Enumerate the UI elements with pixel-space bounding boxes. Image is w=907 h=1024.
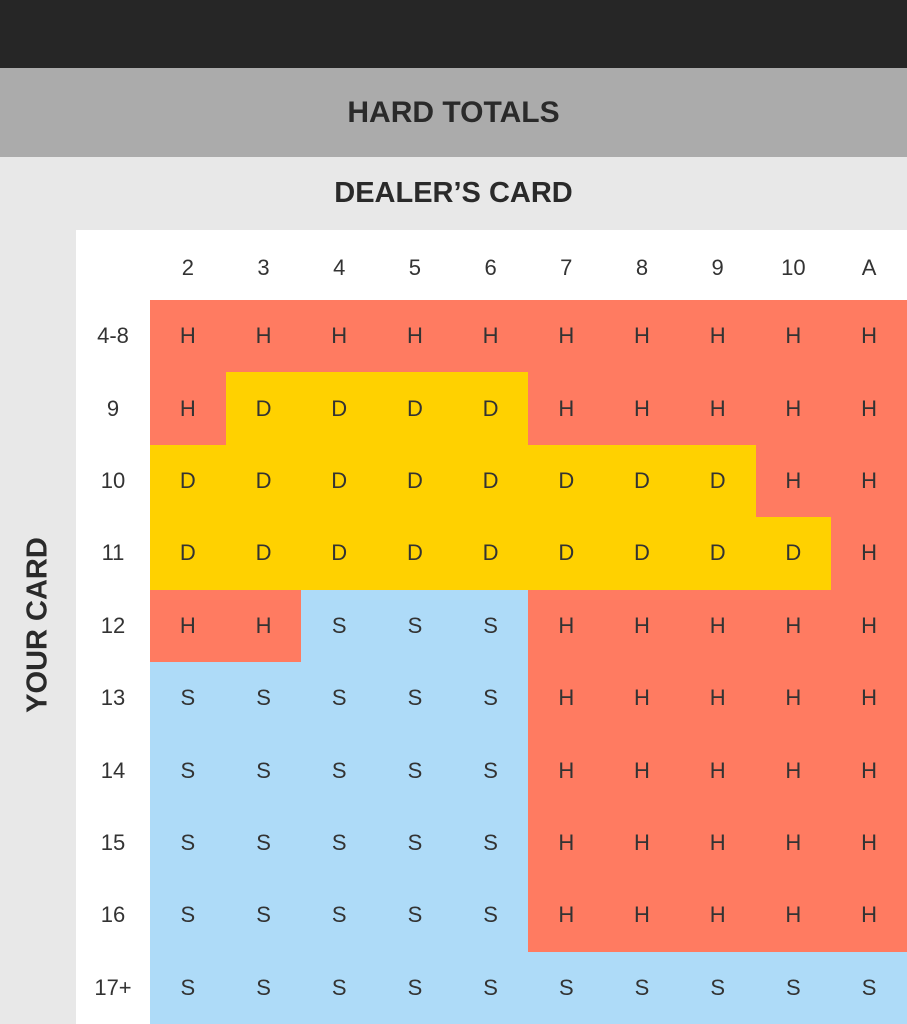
strategy grid: H [558, 323, 574, 348]
strategy grid: S [256, 758, 271, 783]
strategy grid: H [634, 323, 650, 348]
strategy grid: H [331, 323, 347, 348]
player row labels: 15 [101, 830, 125, 855]
strategy grid: D [180, 468, 196, 493]
strategy grid: H [634, 902, 650, 927]
title band [0, 68, 907, 157]
strategy grid: S [559, 975, 574, 1000]
strategy grid: H [785, 685, 801, 710]
strategy grid: S [862, 975, 876, 1000]
strategy grid: H [861, 758, 877, 783]
dealer column headers: 5 [409, 255, 421, 280]
strategy grid: D [634, 540, 650, 565]
player row labels: 10 [101, 468, 125, 493]
strategy grid: S [408, 685, 422, 710]
strategy grid: S [332, 613, 347, 638]
strategy grid: D [407, 468, 423, 493]
dealer's card header: DEALER’S CARD [334, 177, 573, 209]
strategy grid: D [483, 468, 499, 493]
strategy grid: H [634, 830, 650, 855]
strategy grid: S [408, 975, 422, 1000]
strategy grid: D [483, 396, 499, 421]
strategy grid: D [558, 468, 574, 493]
strategy grid: H [785, 396, 801, 421]
strategy grid: S [483, 685, 498, 710]
strategy grid: S [786, 975, 801, 1000]
strategy grid: H [483, 323, 499, 348]
strategy grid: D [331, 396, 347, 421]
player row labels: 12 [101, 613, 125, 638]
left side column: your card [0, 230, 76, 1024]
strategy grid: H [861, 323, 877, 348]
strategy grid: D [483, 540, 499, 565]
strategy grid: D [710, 540, 726, 565]
strategy grid: H [861, 685, 877, 710]
dealer column headers: 7 [560, 255, 572, 280]
strategy grid: H [634, 613, 650, 638]
strategy grid: H [710, 396, 726, 421]
strategy grid: D [634, 468, 650, 493]
strategy grid: S [408, 613, 422, 638]
player row labels: 11 [102, 540, 124, 565]
strategy grid: D [407, 396, 423, 421]
strategy grid: H [558, 685, 574, 710]
strategy grid: H [785, 613, 801, 638]
strategy grid: H [785, 758, 801, 783]
strategy grid: H [558, 902, 574, 927]
player row labels [94, 323, 132, 1000]
strategy grid: S [408, 830, 422, 855]
strategy grid: S [180, 830, 195, 855]
strategy grid: H [861, 468, 877, 493]
player row labels: 13 [101, 685, 125, 710]
strategy grid: D [331, 540, 347, 565]
strategy grid: H [180, 323, 196, 348]
strategy grid: S [635, 975, 649, 1000]
strategy grid: H [634, 685, 650, 710]
strategy grid: H [861, 613, 877, 638]
strategy grid: S [408, 902, 422, 927]
player row labels: 17+ [94, 975, 132, 1000]
strategy grid: H [180, 613, 196, 638]
strategy grid: S [180, 902, 195, 927]
strategy grid: S [332, 830, 347, 855]
strategy grid: D [558, 540, 574, 565]
strategy grid: H [710, 613, 726, 638]
strategy grid: H [861, 902, 877, 927]
dealer column headers: 3 [257, 255, 270, 280]
strategy grid: S [483, 830, 498, 855]
strategy grid: D [256, 468, 271, 493]
strategy grid: S [483, 902, 498, 927]
strategy grid: S [256, 685, 271, 710]
dealer column headers: 6 [484, 255, 497, 280]
dealer column headers: 9 [712, 255, 724, 280]
dealer column headers: 2 [182, 255, 194, 280]
strategy grid: S [256, 830, 271, 855]
strategy grid: D [785, 540, 801, 565]
strategy grid: H [256, 323, 271, 348]
strategy grid: D [407, 540, 423, 565]
strategy grid: S [483, 758, 498, 783]
strategy grid: H [558, 830, 574, 855]
strategy grid: D [710, 468, 726, 493]
dealer column headers: 10 [781, 255, 806, 280]
strategy grid: H [710, 323, 726, 348]
dealer column headers: 4 [333, 255, 345, 280]
left side column: your card: YOUR CARD [22, 537, 54, 713]
player row labels: 14 [101, 758, 125, 783]
dealer column headers [182, 255, 876, 280]
strategy grid: S [256, 902, 271, 927]
strategy grid: H [785, 830, 801, 855]
strategy grid: D [180, 540, 196, 565]
strategy grid: H [558, 758, 574, 783]
strategy grid: S [180, 975, 195, 1000]
top bar [0, 0, 907, 68]
strategy grid: H [710, 902, 726, 927]
dealer column headers: 8 [636, 255, 648, 280]
strategy grid: S [332, 902, 347, 927]
strategy grid: H [180, 396, 196, 421]
strategy grid: H [710, 758, 726, 783]
strategy grid: D [256, 396, 271, 421]
strategy grid: H [785, 323, 801, 348]
strategy grid: H [861, 540, 877, 565]
strategy grid: S [332, 758, 347, 783]
strategy grid: S [332, 975, 347, 1000]
strategy grid: H [558, 396, 574, 421]
strategy grid: H [634, 758, 650, 783]
strategy grid: D [331, 468, 347, 493]
strategy grid: H [861, 830, 877, 855]
strategy grid: S [180, 685, 195, 710]
strategy grid: H [710, 685, 726, 710]
strategy grid: H [785, 468, 801, 493]
strategy grid: H [861, 396, 877, 421]
strategy grid: S [180, 758, 195, 783]
strategy grid: S [408, 758, 422, 783]
player row labels: 9 [107, 396, 119, 421]
strategy grid: H [558, 613, 574, 638]
player row labels: 16 [101, 902, 125, 927]
strategy grid: D [256, 540, 271, 565]
strategy grid: H [634, 396, 650, 421]
title band: HARD TOTALS [347, 96, 560, 128]
strategy grid: H [407, 323, 423, 348]
strategy grid: H [710, 830, 726, 855]
strategy grid: S [710, 975, 725, 1000]
strategy grid: S [483, 613, 498, 638]
player row labels: 4-8 [97, 323, 129, 348]
strategy grid: S [332, 685, 347, 710]
dealer's card header [0, 157, 907, 230]
strategy grid: S [256, 975, 271, 1000]
strategy grid [150, 300, 907, 1024]
strategy grid: H [785, 902, 801, 927]
dealer column headers: A [862, 255, 876, 280]
strategy grid: H [256, 613, 271, 638]
strategy grid: S [483, 975, 498, 1000]
